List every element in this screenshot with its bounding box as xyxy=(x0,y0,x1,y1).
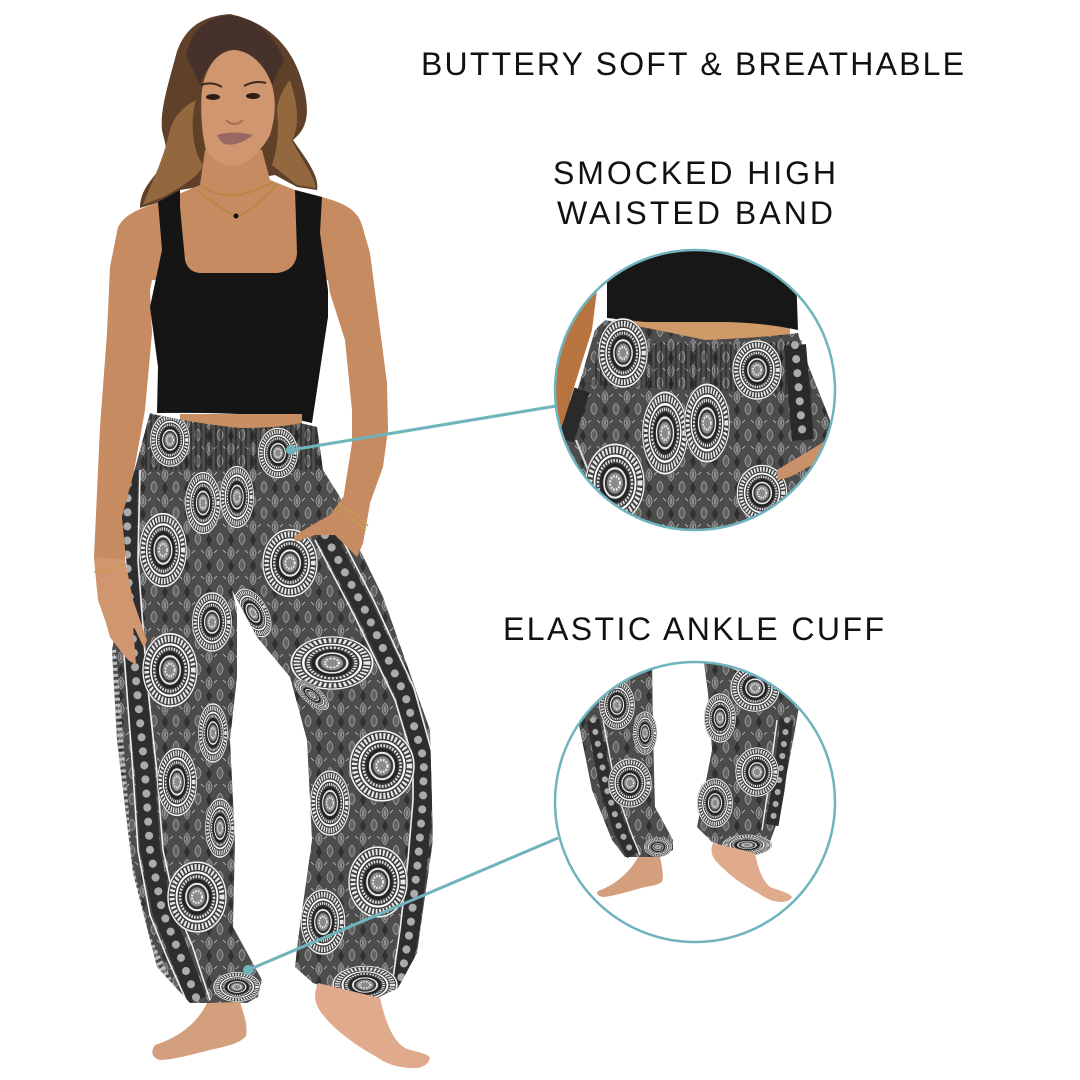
right side print band xyxy=(315,535,434,985)
necklace xyxy=(197,182,277,217)
inset circle: waistband detail xyxy=(545,245,840,540)
inset black top xyxy=(607,245,798,330)
hair highlights xyxy=(143,80,316,205)
inset left foot xyxy=(597,857,663,897)
right foot xyxy=(315,983,430,1068)
inset pants xyxy=(566,320,830,529)
inset mandalas xyxy=(585,318,788,523)
black crop top xyxy=(150,190,328,423)
nose shadow xyxy=(226,120,243,124)
inset circle: ankle cuff detail xyxy=(555,655,835,942)
inset side bands xyxy=(562,341,814,470)
bare midriff xyxy=(180,414,302,430)
heading: smocked high waisted band: SMOCKED HIGH xyxy=(553,155,836,191)
face xyxy=(201,50,275,166)
mandala motifs xyxy=(139,413,415,1004)
eyebrows xyxy=(201,82,266,87)
necklace pendant xyxy=(234,214,238,218)
eyes xyxy=(206,93,260,100)
skin: neck, chest and shoulders xyxy=(94,150,388,667)
inset left arm xyxy=(556,292,597,434)
inset right leg xyxy=(697,655,800,853)
heading: elastic ankle cuff: ELASTIC ANKLE CUFF xyxy=(503,611,884,647)
inset mandalas xyxy=(599,664,780,857)
hair back xyxy=(140,14,317,208)
left side print band xyxy=(112,470,210,1000)
inset right foot xyxy=(711,843,792,902)
inset hand xyxy=(777,440,824,480)
connector line: ankle cuff xyxy=(243,838,558,975)
lips xyxy=(217,132,253,145)
heading: smocked high waisted band: WAISTED BAND xyxy=(557,195,833,231)
connector line: waistband xyxy=(286,406,556,455)
left foot xyxy=(152,1002,247,1060)
smocked waistband xyxy=(145,415,330,470)
hair crown shadow xyxy=(186,15,284,85)
left hand xyxy=(94,557,147,665)
inset left leg xyxy=(578,655,673,857)
inset smocking xyxy=(590,335,812,395)
patterned pants xyxy=(112,413,433,1003)
hand in pocket xyxy=(294,497,370,557)
headline: buttery soft and breathable: BUTTERY SOFT & BREATHABLE xyxy=(421,46,964,82)
inset midriff xyxy=(632,320,790,340)
model figure xyxy=(94,14,450,1068)
heading: smocked high waisted band xyxy=(553,155,836,231)
wrist bracelets xyxy=(94,505,368,572)
inset side bands xyxy=(593,720,787,855)
